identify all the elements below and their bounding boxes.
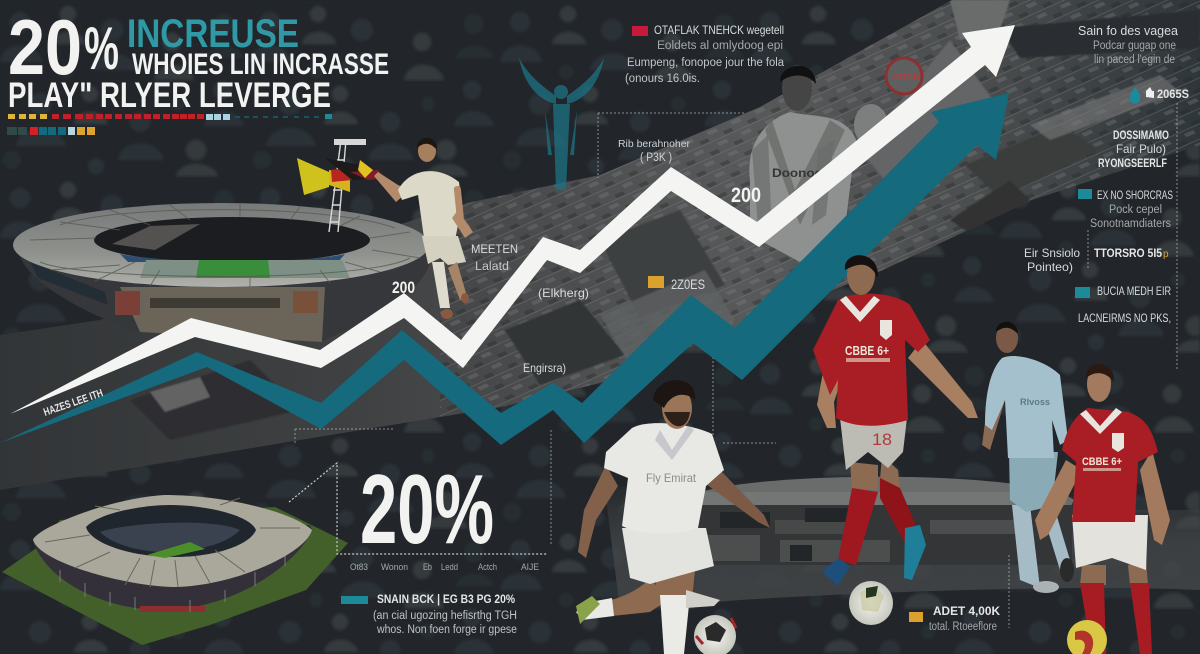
value labels on chart: HAZES LEE ITH: [42, 387, 105, 419]
callout below stat: whos. Non foen forge ir gpese: [376, 624, 517, 636]
light blue player: [982, 322, 1074, 593]
label: PSK: Rib berahnoher: [618, 138, 690, 150]
callout: top centre: (onours 16.0is.: [625, 73, 700, 85]
right column notes: Sonotnamdiaters: [1090, 218, 1171, 230]
left white player: [576, 380, 770, 654]
value labels on chart: 2Z0ES: [671, 276, 705, 292]
big 20% stat with dotted frame: 20%: [360, 454, 494, 564]
gray faded player in background: GOOD: [892, 72, 920, 82]
right column notes: RYONGSEERLF: [1098, 156, 1167, 170]
title block: INCREUSE: [127, 12, 299, 56]
right column notes: BUCIA MEDH EIR: [1097, 284, 1171, 298]
value labels on chart: 200: [731, 184, 761, 207]
big 20% stat with dotted frame: [289, 454, 548, 572]
right column notes: Podcar gugap one: [1093, 40, 1176, 52]
big 20% stat with dotted frame: Ledd: [441, 562, 458, 572]
right red player: CBBE 6+: [1082, 456, 1122, 468]
callout below stat: SNAIN BCK | EG B3 PG 20%: [377, 592, 515, 606]
value labels on chart: MEETEN: [471, 242, 518, 256]
callout below stat: (an cial ugozing hefisrthg TGH: [373, 610, 517, 622]
right column notes: TTORSRO 5I5: [1094, 246, 1162, 260]
value labels on chart: Engirsra): [523, 361, 566, 375]
flag tower with flags: [297, 139, 385, 232]
title block: WHOIES LIN INCRASSE: [132, 48, 389, 81]
big 20% stat with dotted frame: Wonon: [381, 562, 408, 572]
callout: bottom yellow: total. Rtoeeflore: [929, 621, 997, 633]
gray diagonal band with grandstand texture: [0, 0, 1200, 490]
gray faded player in background: Doonoe: [772, 166, 822, 180]
white rising arrow: [10, 25, 1015, 414]
callout: bottom yellow: ADET 4,00K: [933, 604, 1000, 618]
left white player: Fly Emirat: [646, 471, 697, 485]
right column notes: Eir Snsiolo: [1024, 246, 1080, 260]
footballs: [694, 581, 1107, 654]
right column notes: Pock cepel: [1109, 204, 1162, 216]
title block: PLAY" RLYER LEVERGE: [8, 76, 331, 115]
title block: [8, 3, 389, 115]
centre red player: [813, 255, 978, 586]
callout: bottom yellow: [909, 604, 1000, 633]
label: PSK: [618, 138, 690, 164]
right red player: [1035, 364, 1170, 654]
gray faded player in background: [749, 58, 922, 262]
teal rising arrow: [0, 93, 1009, 445]
value labels on chart: (Elkherg): [538, 286, 589, 300]
big 20% stat with dotted frame: Ot83: [350, 562, 368, 572]
right column notes: Pointeo): [1027, 260, 1073, 274]
title block: 20: [8, 3, 82, 91]
right column notes: DOSSIMAMO: [1113, 128, 1169, 142]
right column notes: p: [1163, 249, 1169, 260]
big 20% stat with dotted frame: Eb: [423, 562, 432, 572]
lower gray panel and faded stadium: [605, 477, 1200, 610]
light blue player: Rlvoss: [1020, 397, 1050, 407]
ghosted teal emblem: [519, 58, 604, 190]
big 20% stat with dotted frame: AIJE: [521, 562, 539, 572]
right column notes: [1024, 23, 1189, 325]
callout: top centre: [625, 23, 785, 85]
top-left stadium: [13, 203, 432, 342]
callout: top centre: OTAFLAK TNEHCK wegetell: [654, 23, 784, 37]
value labels on chart: [42, 184, 761, 419]
value labels on chart: 200: [392, 278, 415, 297]
right column notes: LACNEIRMS NO PKS,: [1078, 311, 1171, 325]
right column notes: Fair Pulo): [1116, 142, 1166, 156]
top white player: [374, 138, 473, 319]
centre red player: 18: [872, 430, 892, 449]
callout: top centre: Eoldets al omlydoog epi: [657, 40, 783, 52]
centre red player: CBBE 6+: [845, 343, 889, 358]
title block: %: [84, 15, 119, 82]
callout: top centre: Eumpeng, fonopoe jour the fola: [627, 57, 785, 69]
big 20% stat with dotted frame: Actch: [478, 562, 497, 572]
right column notes: lin paced l'egin de: [1094, 54, 1175, 66]
right column notes: Sain fo des vagea: [1078, 23, 1179, 38]
bottom-left stadium: [2, 495, 348, 645]
value labels on chart: Lalatd: [475, 261, 509, 273]
dashed guide lines: [295, 103, 1177, 628]
callout below stat: [341, 592, 517, 636]
colour swatch rows: [7, 114, 332, 135]
right column notes: 2065S: [1157, 87, 1189, 101]
label: PSK: ( P3K ): [640, 152, 672, 164]
